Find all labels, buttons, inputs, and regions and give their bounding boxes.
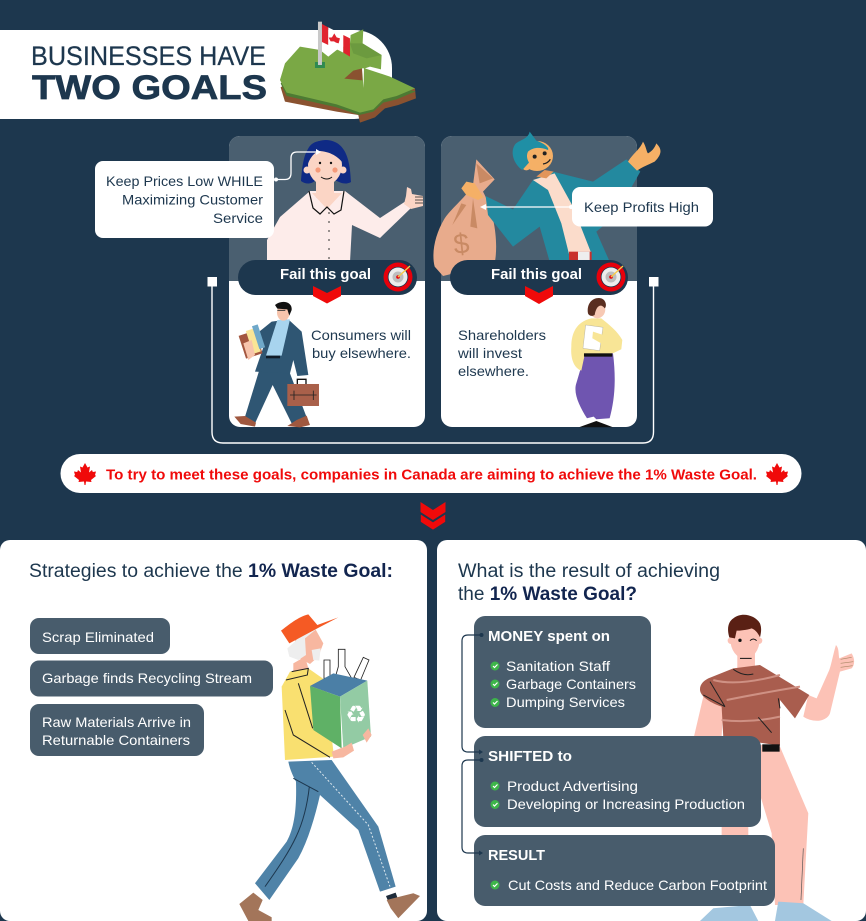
list: result item: Cut Costs and Reduce Carbon Footprint <box>508 877 767 893</box>
fail pill: left <box>238 260 417 304</box>
title text <box>31 41 267 107</box>
panel: right goal card <box>441 136 637 427</box>
callout: keep prices low: Maximizing Customer <box>122 192 263 208</box>
fail pill: right <box>450 260 628 304</box>
strategy pill: raw materials: Returnable Containers <box>42 732 190 748</box>
text: shareholders will invest elsewhere: will invest <box>457 345 522 361</box>
illustration: man carrying recycling bag <box>239 614 420 921</box>
icon: Canada map with flag <box>280 22 416 123</box>
heading: results: What is the result of achieving <box>458 561 720 582</box>
illustration: man with money bag: $ <box>452 228 471 261</box>
fail pill: left: Fail this goal <box>280 266 371 283</box>
list: shifted items: Developing or Increasing Production <box>507 796 745 812</box>
box: money spent on: MONEY spent on <box>488 629 610 645</box>
list: money items: Dumping Services <box>506 694 625 710</box>
illustration: man carrying recycling bag: ♻ <box>345 701 367 729</box>
chevron: right <box>525 286 553 304</box>
text: consumers will buy elsewhere <box>311 327 411 361</box>
heading: results <box>458 561 720 605</box>
chevron: left <box>313 286 341 304</box>
strategy pill: scrap: Scrap Eliminated <box>42 629 154 645</box>
illustration: man giving thumbs up <box>694 615 854 921</box>
panel: left goal card <box>229 136 425 427</box>
arrow: shifted to result <box>462 758 484 856</box>
list: shifted items <box>490 778 745 812</box>
strategy pill: raw materials <box>30 704 204 756</box>
list: money items <box>490 658 636 710</box>
panel: results <box>437 540 866 921</box>
callout: keep profits high <box>572 187 713 226</box>
strategy pill: scrap <box>30 618 170 654</box>
callout: 1% waste goal banner <box>60 454 802 493</box>
list: money items: Garbage Containers <box>506 676 636 692</box>
strategy pill: raw materials: Raw Materials Arrive in <box>42 714 191 730</box>
strategy pill: garbage: Garbage finds Recycling Stream <box>42 670 252 686</box>
arrow: money to shifted <box>462 633 484 754</box>
callout: 1% waste goal banner: To try to meet these goals, companies in Canada are aiming to achieve the 1% Waste Goal. <box>106 468 757 484</box>
title text: BUSINESSES HAVE <box>31 41 266 71</box>
icon: maple leaf right <box>766 463 788 485</box>
illustration: walking businessman <box>234 302 319 427</box>
callout: keep profits high: Keep Profits High <box>584 199 699 215</box>
arrow: double red chevron <box>420 502 446 530</box>
heading: strategies: Strategies to achieve the 1% Waste Goal: <box>29 561 393 582</box>
strategy pill: garbage <box>30 660 273 696</box>
box: money spent on <box>474 616 651 728</box>
connector bracket between goal cards <box>208 277 658 443</box>
heading: results: the 1% Waste Goal? <box>458 584 637 605</box>
text: consumers will buy elsewhere: Consumers will <box>311 327 411 343</box>
illustration: man with money bag <box>433 132 660 276</box>
icon: target left <box>384 262 412 292</box>
text: shareholders will invest elsewhere: Shareholders <box>458 327 546 343</box>
list: money items: Sanitation Staff <box>506 658 610 674</box>
box: result <box>474 835 775 906</box>
fail pill: right: Fail this goal <box>491 266 582 283</box>
text: shareholders will invest elsewhere: elsewhere. <box>458 363 529 379</box>
arrow: profits callout to money bag <box>480 204 573 210</box>
icon: maple leaf left <box>74 463 96 485</box>
icon: target right <box>596 262 626 292</box>
illustration: woman with papers <box>571 298 622 427</box>
arrow: prices callout to woman <box>274 149 321 182</box>
text: shareholders will invest elsewhere <box>457 327 546 379</box>
panel: strategies <box>0 540 427 921</box>
callout: keep prices low: Keep Prices Low WHILE <box>106 173 263 189</box>
list: shifted items: Product Advertising <box>507 778 638 794</box>
box: result: RESULT <box>488 848 545 864</box>
box: shifted to: SHIFTED to <box>488 749 572 765</box>
callout: keep prices low <box>95 161 274 238</box>
title banner <box>0 30 392 119</box>
text: consumers will buy elsewhere: buy elsewhere. <box>312 345 411 361</box>
box: shifted to <box>474 736 761 827</box>
illustration: woman with thumb up <box>267 140 423 262</box>
callout: keep prices low: Service <box>213 210 263 226</box>
title text: TWO GOALS <box>32 69 267 107</box>
